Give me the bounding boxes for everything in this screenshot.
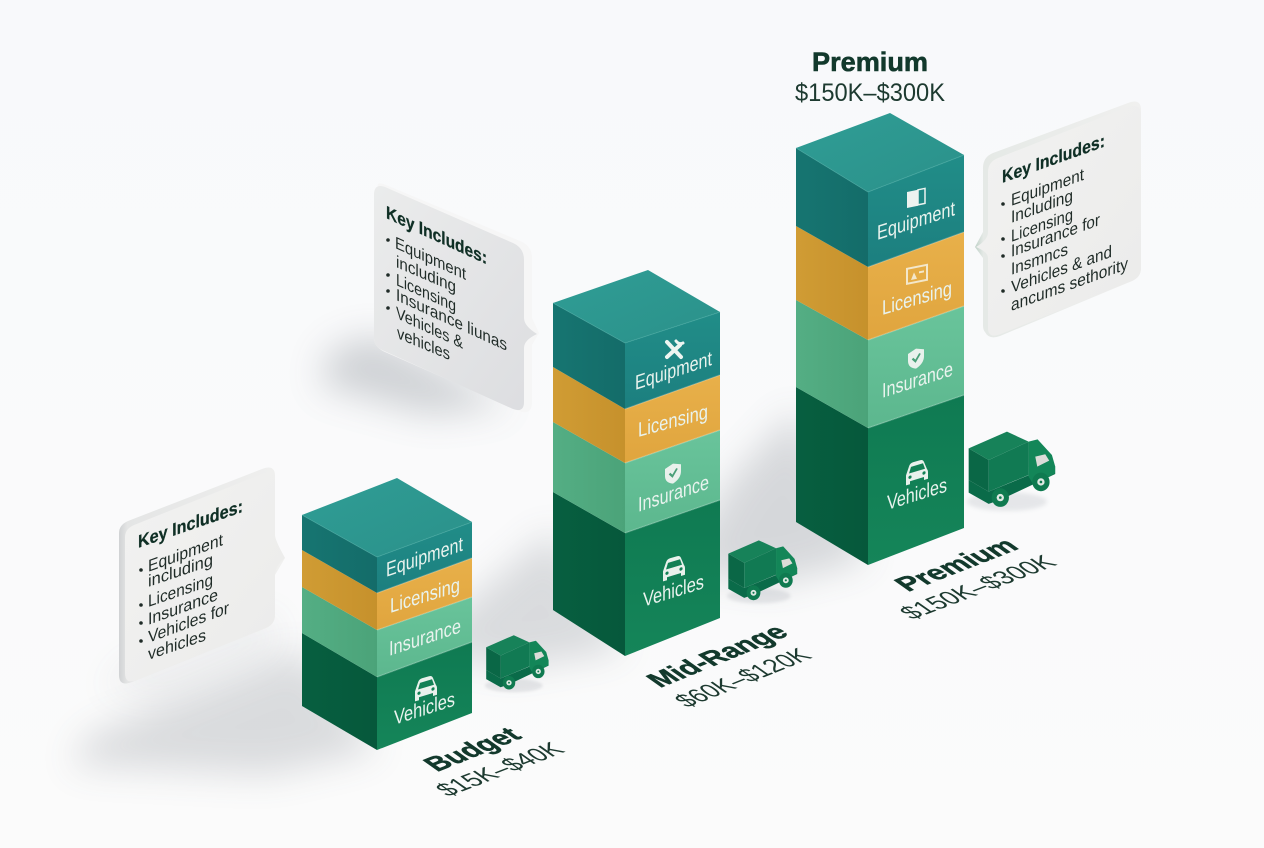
label: licensing: Licensing — [882, 277, 952, 320]
bullet list: Equipment — [395, 233, 466, 284]
label: equipment: Equipment — [877, 197, 955, 245]
label: licensing: Licensing — [390, 574, 460, 618]
icon: truck mid-range — [727, 540, 797, 603]
bullet list: Licensing — [1011, 204, 1073, 246]
bullet list: vehicles — [397, 323, 450, 364]
bullet list — [386, 233, 507, 364]
bar: budget — [302, 478, 472, 750]
callout: mid-range — [374, 183, 539, 412]
label: insurance: Insurance — [389, 615, 461, 661]
callout: budget — [119, 468, 285, 683]
label: licensing: Licensing — [638, 400, 708, 442]
bullet list — [1001, 164, 1128, 315]
floor label: budget: $15K–$40K — [429, 738, 571, 800]
bullet list: Including — [1011, 185, 1073, 227]
heading: Key Includes: — [1002, 130, 1105, 187]
bullet list: including — [148, 549, 213, 591]
icon: shield — [908, 346, 924, 371]
bullet list: Insurance liunas — [396, 285, 507, 355]
label: equipment: Equipment — [386, 533, 463, 582]
icon: wrench and screwdriver — [667, 341, 683, 357]
label: vehicles: Vehicles — [394, 688, 455, 730]
title: premium tier — [795, 47, 945, 107]
floor label: mid-range — [640, 621, 818, 711]
floor label: premium: $150K–$300K — [893, 551, 1063, 623]
label: insurance: Insurance — [638, 471, 709, 517]
heading: Key Includes: — [386, 203, 487, 269]
heading: Key Includes: — [138, 495, 243, 552]
label: insurance: Insurance — [882, 358, 953, 403]
floor label: mid-range: Mid-Range — [640, 621, 796, 692]
bullet list: Vehicles for — [148, 598, 229, 647]
bullet list: Insmncs — [1011, 239, 1068, 279]
icon: car — [663, 554, 685, 581]
floor label: budget: Budget — [417, 723, 529, 776]
label: vehicles: Vehicles — [887, 474, 947, 515]
bullet list — [139, 529, 229, 664]
bar: premium — [796, 113, 964, 565]
bullet list: Licensing — [396, 270, 456, 316]
ground shadows — [70, 335, 868, 775]
icon: truck premium — [967, 432, 1055, 511]
bullet list: Vehicles & and — [1011, 241, 1112, 297]
callout: premium — [975, 102, 1141, 337]
bullet list: vehicles — [148, 625, 206, 664]
bullet list: Equipment — [1011, 164, 1084, 210]
bullet list: Vehicles & — [396, 303, 463, 353]
label: equipment: Equipment — [635, 347, 712, 395]
bullet list: Equipment — [148, 529, 223, 576]
bullet list: Insurance for — [1011, 209, 1100, 261]
icon: truck budget — [485, 635, 549, 692]
floor label: mid-range: $60K–$120K — [668, 644, 818, 711]
label: vehicles: Vehicles — [643, 571, 704, 612]
title: premium tier: Premium — [812, 47, 928, 77]
bullet list: Insurance — [148, 584, 218, 629]
icon: car — [906, 458, 928, 485]
bullet list: ancums sethority — [1011, 253, 1128, 315]
icon: licence card — [907, 265, 927, 284]
bullet list: Licensing — [148, 569, 213, 611]
floor label: premium: Premium — [888, 534, 1026, 596]
title: premium tier: $150K–$300K — [795, 79, 945, 107]
icon: equipment box — [907, 188, 925, 208]
icon: car — [415, 674, 437, 701]
bar: mid-range — [553, 270, 720, 656]
icon: shield — [665, 461, 681, 486]
bullet list: including — [396, 252, 456, 297]
